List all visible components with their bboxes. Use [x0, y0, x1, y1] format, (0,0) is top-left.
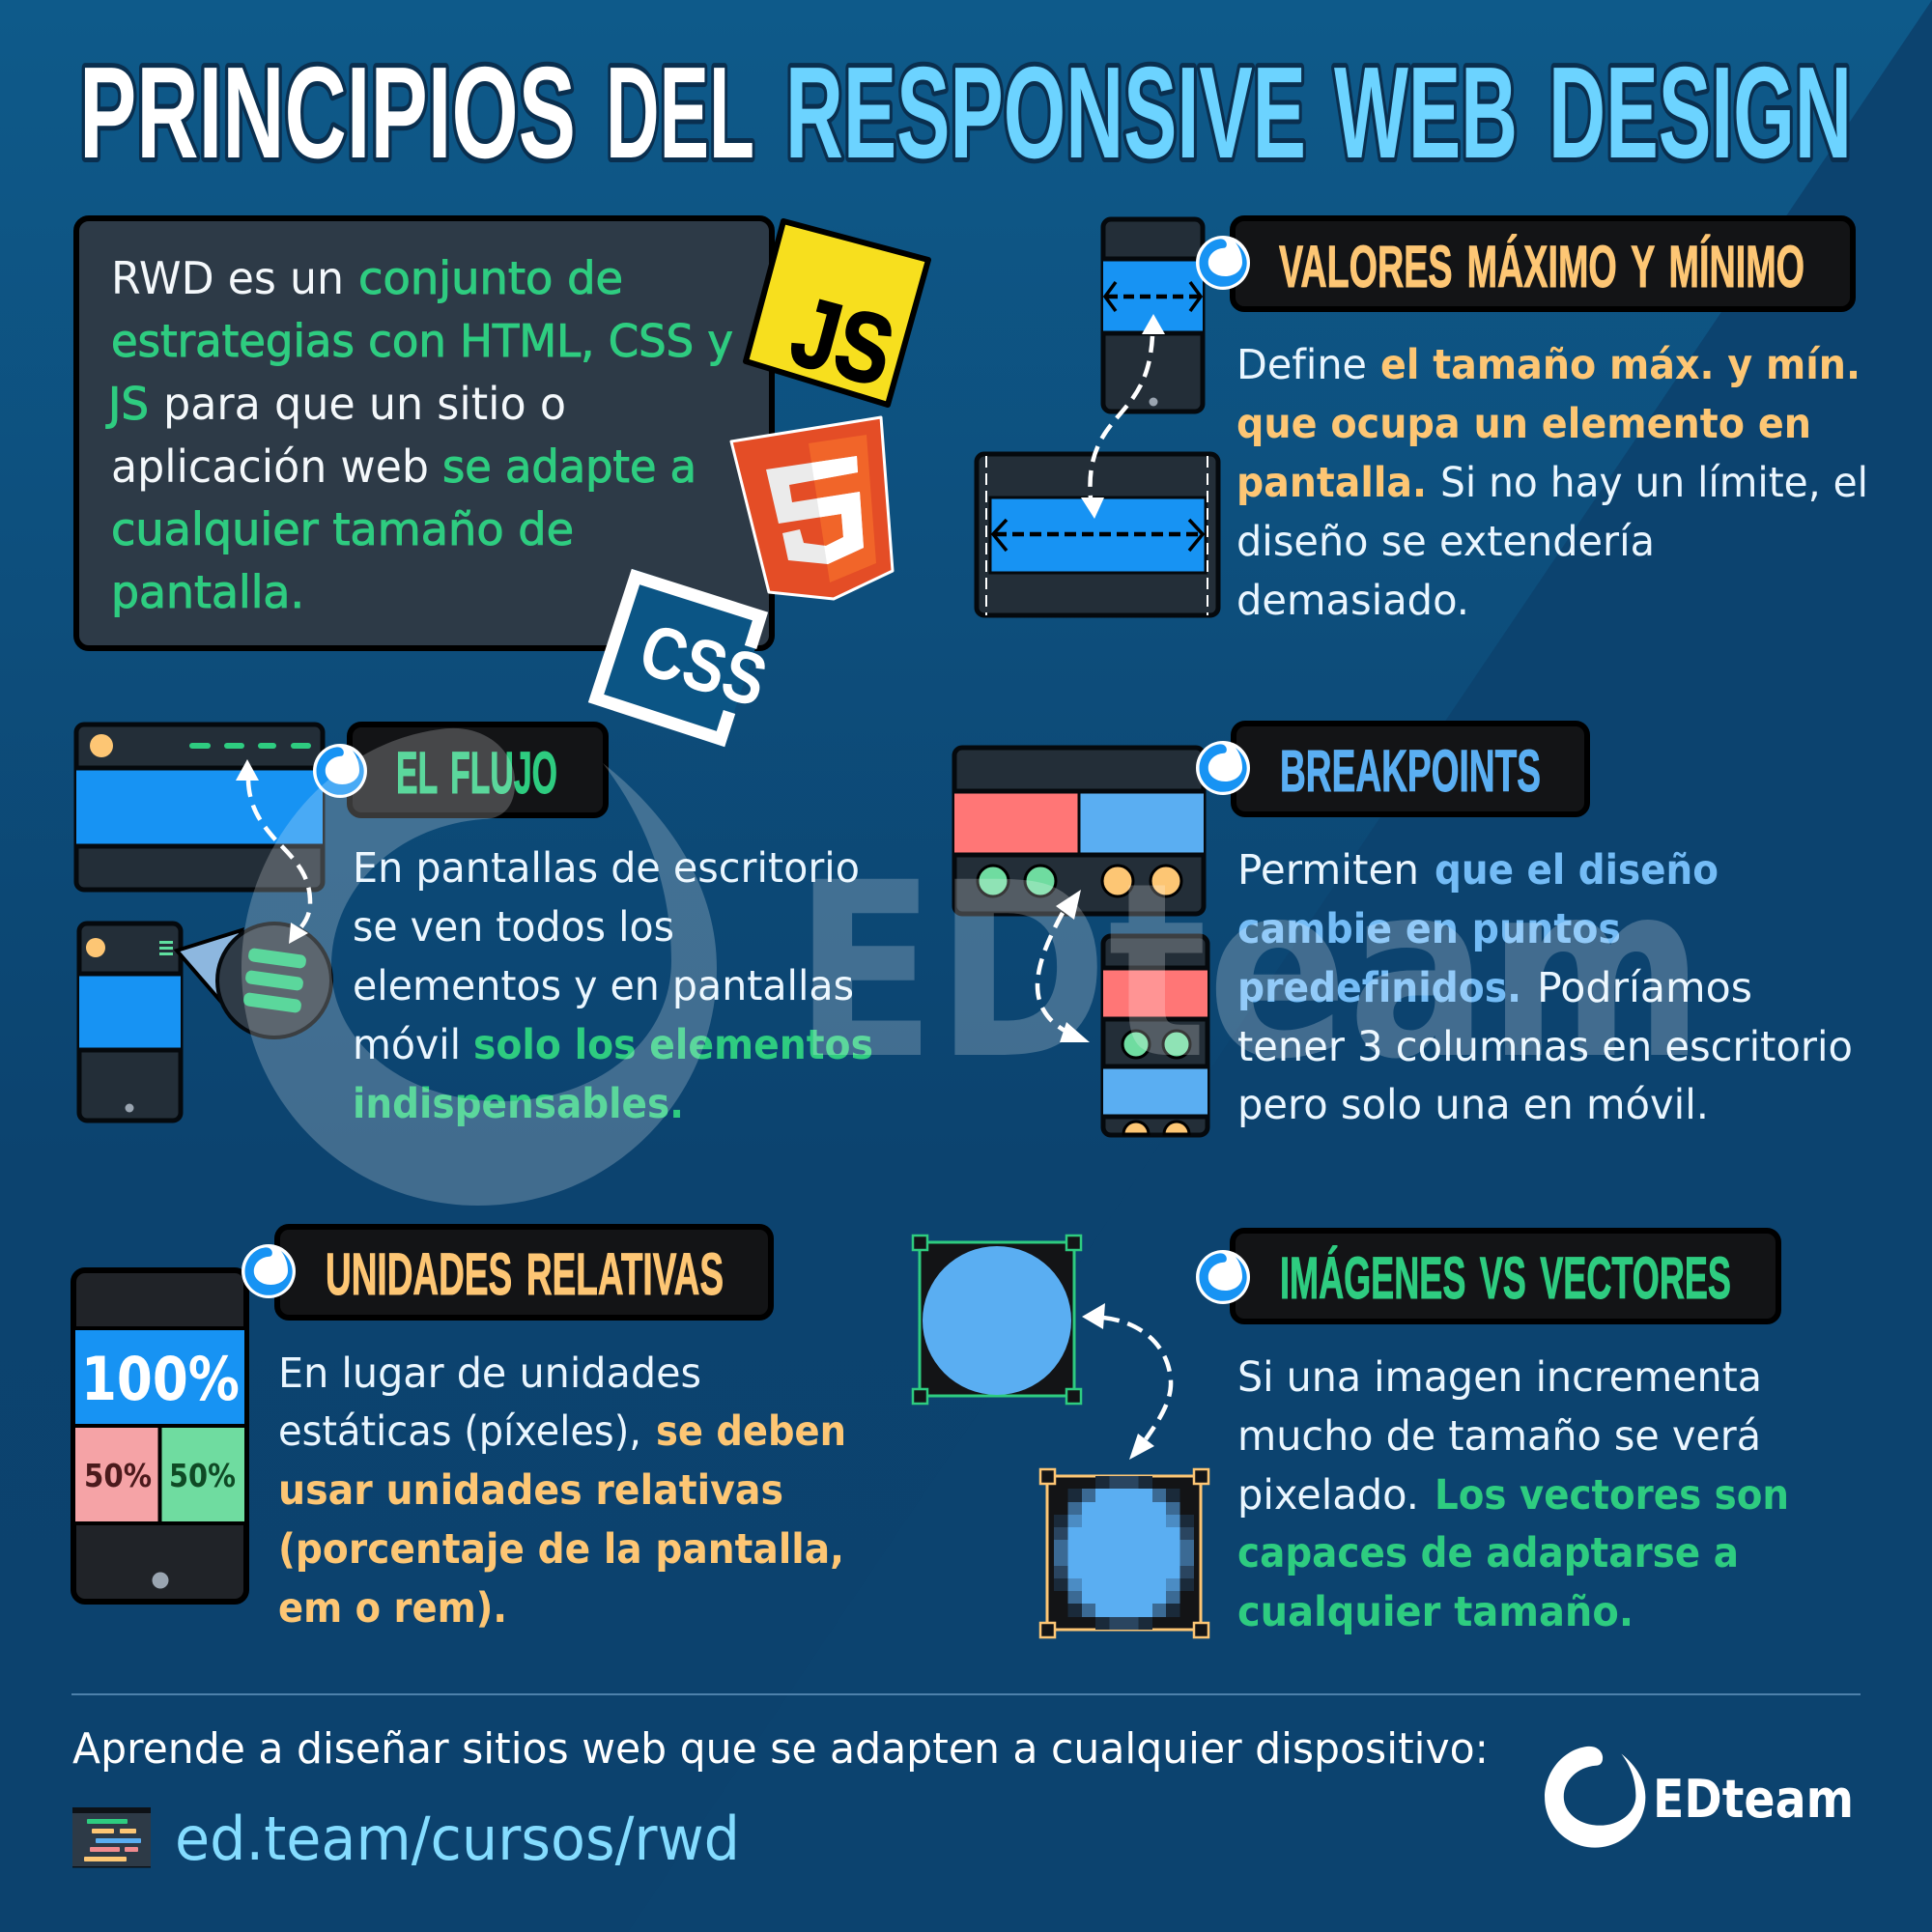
text: breakpoints: cambie en puntos	[1237, 905, 1621, 953]
illustration: phone with percentages: 50%	[169, 1457, 236, 1494]
icon: JS: JS	[781, 275, 904, 408]
illustration: vector circle	[913, 1236, 1081, 1404]
intro text: se adapte a	[442, 440, 696, 493]
watermark	[242, 728, 1704, 1206]
text: valores: que ocupa un elemento en	[1236, 400, 1811, 448]
text: unidades: usar unidades relativas	[278, 1466, 783, 1515]
text: unidades: (porcentaje de la pantalla,	[278, 1525, 844, 1574]
badge	[1196, 1250, 1250, 1304]
icon: JS	[746, 221, 928, 408]
text: imagenes: pixelado.	[1237, 1471, 1419, 1520]
text: valores: el tamaño máx. y mín.	[1380, 341, 1861, 389]
illustration: pixelated circle	[1040, 1469, 1208, 1637]
title: WEB	[1334, 40, 1518, 185]
heading: el flujo	[350, 724, 606, 815]
text: breakpoints: Permiten	[1237, 846, 1419, 895]
intro text: JS	[105, 378, 149, 430]
arrow: imagenes	[1082, 1303, 1171, 1460]
panel: breakpoints	[954, 724, 1853, 1135]
text: flujo	[353, 844, 873, 1128]
heading: unidades: UNIDADES RELATIVAS	[326, 1241, 724, 1307]
heading: imagenes	[1233, 1231, 1778, 1321]
badge	[1196, 741, 1250, 795]
text: valores: pantalla.	[1236, 459, 1427, 507]
intro text	[105, 252, 733, 618]
panel: intro	[76, 218, 772, 648]
text: imagenes: cualquier tamaño.	[1237, 1588, 1634, 1636]
text: unidades: se deben	[656, 1407, 846, 1456]
panel: el flujo	[76, 724, 873, 1128]
text: breakpoints: que el diseño	[1435, 846, 1719, 895]
heading: el flujo: EL FLUJO	[396, 740, 557, 806]
footer call to action	[72, 1724, 1489, 1874]
text: imagenes: Si una imagen incrementa	[1237, 1353, 1762, 1402]
text: unidades	[278, 1350, 846, 1633]
illustration: phone with percentages	[73, 1270, 246, 1602]
text: imagenes: capaces de adaptarse a	[1237, 1529, 1739, 1577]
arrow: valores	[1081, 314, 1165, 519]
text: imagenes: Los vectores son	[1435, 1471, 1789, 1520]
text: flujo: En pantallas de escritorio	[353, 844, 860, 893]
footer call to action: ed.team/cursos/rwd	[175, 1804, 740, 1874]
intro text: RWD es un	[111, 252, 344, 304]
text: flujo: indispensables.	[353, 1080, 684, 1128]
text: flujo: solo los elementos	[473, 1021, 873, 1069]
text: flujo: móvil	[353, 1021, 461, 1069]
text: breakpoints: Podríamos	[1537, 964, 1752, 1012]
intro text: conjunto de	[358, 252, 623, 304]
heading: valores	[1233, 218, 1853, 309]
title: DEL	[606, 40, 754, 185]
panel: valores	[977, 218, 1868, 625]
badge	[242, 1244, 296, 1298]
text: unidades: em o rem).	[278, 1584, 507, 1633]
arrow: flujo	[236, 759, 310, 944]
illustration: phone and desktop limits	[977, 219, 1218, 615]
intro text: para que un sitio o	[163, 378, 566, 430]
title: PRINCIPIOS	[79, 40, 576, 185]
icon: code window	[72, 1807, 151, 1868]
text: unidades: estáticas (píxeles),	[278, 1407, 641, 1456]
arrow: breakpoints	[1037, 890, 1090, 1042]
text: breakpoints: tener 3 columnas en escritorio	[1237, 1023, 1853, 1071]
heading: unidades	[277, 1227, 771, 1318]
text: imagenes	[1237, 1353, 1789, 1636]
icon: CSS	[589, 569, 776, 747]
text: breakpoints: pero solo una en móvil.	[1237, 1081, 1709, 1129]
text: flujo: se ven todos los	[353, 903, 674, 952]
text: valores: diseño se extendería	[1236, 518, 1655, 566]
illustration: desktop and mobile	[76, 724, 323, 1121]
text: valores: Define	[1236, 341, 1367, 389]
title: RESPONSIVE	[785, 40, 1306, 185]
heading: breakpoints	[1234, 724, 1587, 814]
badge	[1196, 236, 1250, 290]
icon: CSS: CSS	[631, 609, 776, 724]
icon: HTML5	[731, 417, 893, 599]
text: flujo: elementos y en pantallas	[353, 962, 854, 1010]
footer call to action: Aprende a diseñar sitios web que se adapten a cualquier dispositivo:	[72, 1724, 1489, 1774]
intro text: cualquier tamaño de	[111, 503, 574, 555]
title	[79, 40, 1852, 185]
text: breakpoints: predefinidos.	[1237, 964, 1521, 1012]
EDteam logo: EDteam	[1653, 1769, 1854, 1830]
text: breakpoints	[1237, 846, 1853, 1129]
panel: unidades relativas	[73, 1227, 846, 1633]
watermark: EDteam	[794, 831, 1704, 1112]
illustration: phone with percentages: 50%	[84, 1457, 152, 1494]
text: valores: Si no hay un límite, el	[1440, 459, 1868, 507]
text: valores: demasiado.	[1236, 577, 1469, 625]
text: unidades: En lugar de unidades	[278, 1350, 701, 1398]
heading: breakpoints: BREAKPOINTS	[1280, 738, 1541, 804]
panel: imagenes vs vectores	[913, 1231, 1789, 1637]
illustration: desktop and mobile columns	[954, 748, 1208, 1135]
intro text: aplicación web	[111, 440, 429, 493]
callout: zoom on menu	[177, 923, 331, 1037]
text: valores	[1236, 341, 1868, 625]
text: imagenes: mucho de tamaño se verá	[1237, 1412, 1761, 1461]
intro text: estrategias con HTML, CSS y	[111, 315, 733, 367]
badge	[313, 744, 367, 798]
intro text: pantalla.	[111, 566, 304, 618]
illustration: phone with percentages: 100%	[81, 1344, 240, 1414]
EDteam logo	[1545, 1747, 1854, 1848]
